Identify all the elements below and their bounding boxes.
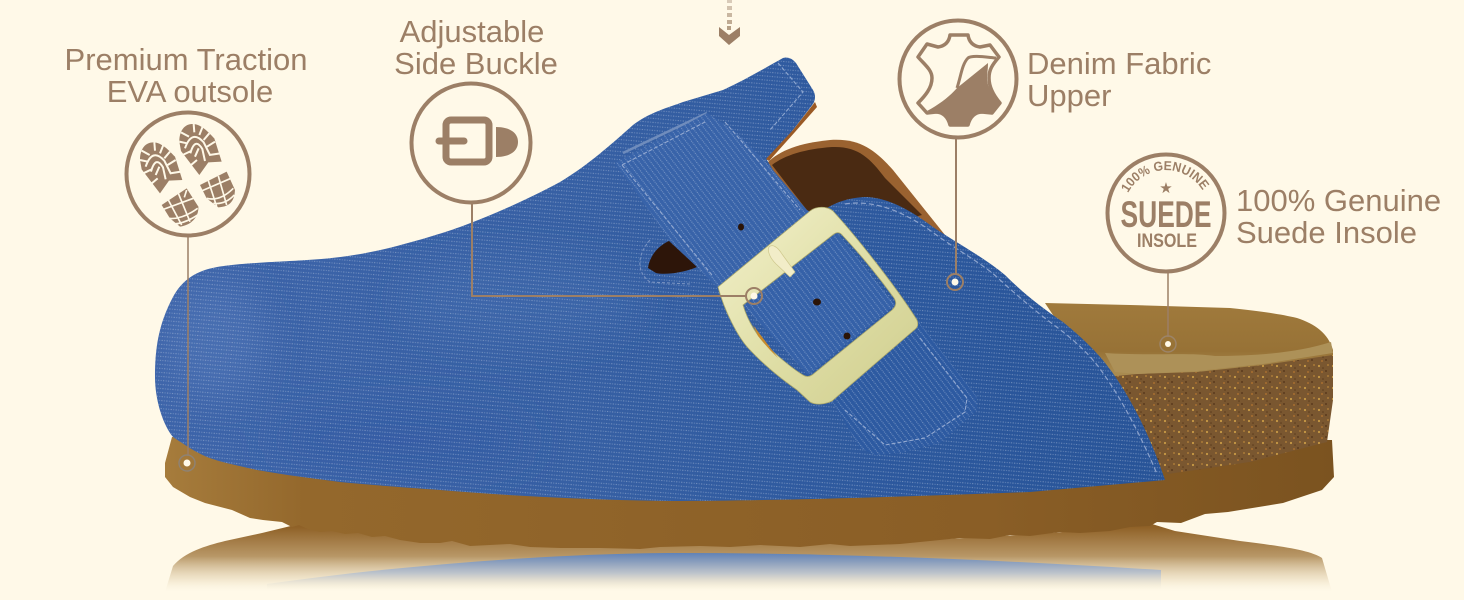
buckle holes bbox=[813, 298, 850, 340]
callout: traction outsole bbox=[65, 42, 307, 471]
icon: suede badge bbox=[1106, 152, 1226, 274]
leader line bbox=[1167, 272, 1169, 337]
heading: Premium Traction bbox=[65, 42, 307, 77]
leader line bbox=[955, 138, 957, 274]
cork midsole bbox=[1105, 353, 1333, 474]
icon: suede badge: 100% GENUINE bbox=[1122, 161, 1210, 192]
tab stitching bbox=[770, 63, 803, 130]
upper strap texture bbox=[615, 113, 815, 295]
right heel bbox=[200, 172, 235, 207]
insole front rim bbox=[1105, 342, 1333, 374]
icon: leather hide bbox=[900, 20, 1016, 138]
arrow: scroll down bbox=[719, 0, 740, 45]
left heel bbox=[162, 188, 198, 227]
denim shading bbox=[180, 294, 254, 386]
upper strap bbox=[615, 113, 815, 295]
orange gap inside buckle bbox=[753, 325, 778, 358]
marker bbox=[947, 274, 963, 290]
callout: side buckle bbox=[394, 14, 762, 304]
icon: suede badge: SUEDE bbox=[1120, 194, 1212, 235]
heading line 2: Suede Insole bbox=[1236, 215, 1417, 250]
back stitching bbox=[845, 203, 1157, 474]
strap hole bbox=[738, 224, 744, 230]
denim texture bbox=[155, 58, 1165, 501]
strap through buckle bbox=[743, 233, 895, 375]
heading line 2: EVA outsole bbox=[107, 74, 273, 109]
marker bbox=[179, 455, 195, 471]
cork texture bbox=[1105, 353, 1333, 474]
lower strap texture bbox=[800, 320, 977, 455]
icon: footprints bbox=[126, 112, 250, 236]
shoe bbox=[155, 58, 1334, 592]
icon: belt buckle bbox=[412, 84, 530, 202]
strap through buckle texture bbox=[743, 233, 895, 375]
reflection bbox=[165, 524, 1332, 592]
callout: denim upper bbox=[900, 20, 1211, 290]
heading line 2: Side Buckle bbox=[394, 46, 558, 81]
strap slot bbox=[623, 113, 707, 153]
callout: suede insole bbox=[1106, 152, 1441, 353]
suede insole bbox=[1045, 303, 1333, 378]
brown edge behind tab bbox=[766, 102, 817, 161]
buckle frame bbox=[718, 207, 918, 404]
right sole bbox=[179, 124, 222, 175]
left sole bbox=[140, 142, 182, 193]
icon: suede badge: INSOLE bbox=[1137, 231, 1197, 252]
strap bbox=[615, 113, 977, 455]
t-hole bbox=[648, 241, 697, 274]
heading: 100% Genuine bbox=[1236, 183, 1441, 218]
t-hole stitching bbox=[640, 240, 690, 284]
strap stitching bbox=[622, 122, 967, 445]
heading: Adjustable bbox=[400, 14, 544, 49]
heading: Denim Fabric bbox=[1027, 46, 1211, 81]
icon: suede badge: ★ bbox=[1159, 180, 1173, 197]
leader line bbox=[187, 236, 189, 456]
marker bbox=[1160, 336, 1176, 352]
leader line bbox=[472, 203, 746, 296]
buckle pin bbox=[768, 246, 795, 277]
tread prints bbox=[140, 124, 235, 227]
marker bbox=[746, 288, 762, 304]
lining outer edge bbox=[767, 140, 945, 240]
outsole bbox=[165, 437, 1334, 549]
lining inner bbox=[772, 147, 922, 240]
lower strap bbox=[800, 320, 977, 455]
buckle bbox=[718, 207, 918, 404]
upper: denim bbox=[155, 58, 1165, 501]
heading line 2: Upper bbox=[1027, 78, 1111, 113]
